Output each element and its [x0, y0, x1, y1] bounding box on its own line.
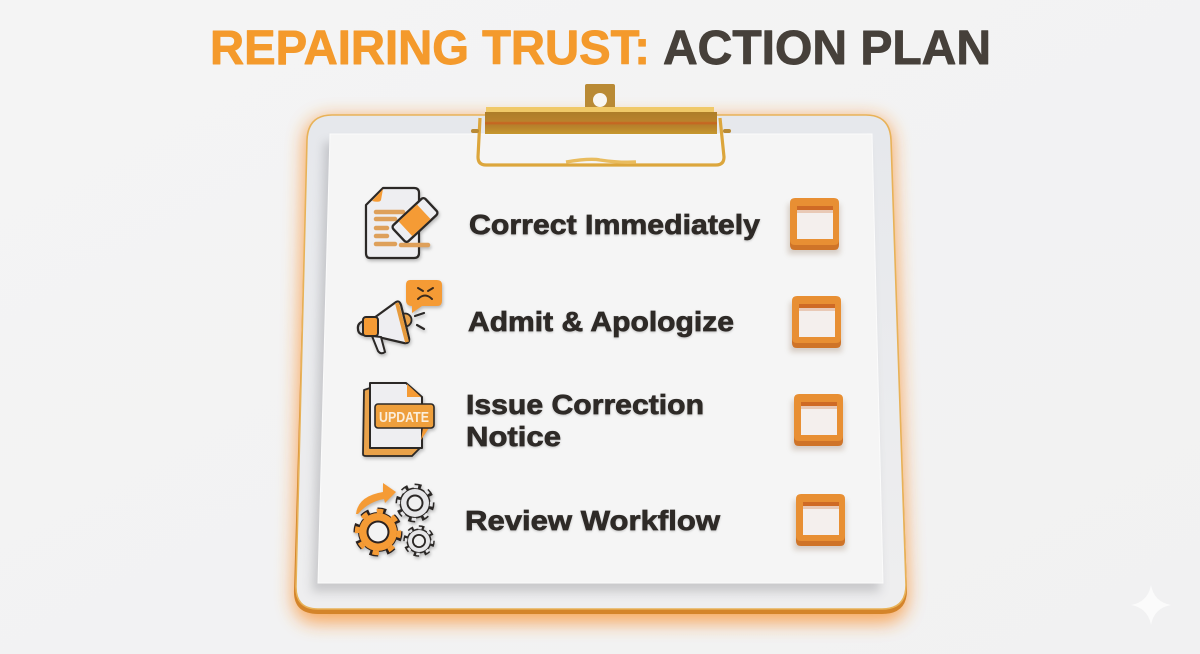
- icon: gears and arrow: [356, 483, 432, 554]
- paper sheet: [312, 134, 883, 592]
- label: issue correction notice: Issue Correction: [466, 389, 704, 420]
- icon: megaphone and speech bubble: [358, 280, 442, 353]
- icon: update document: UPDATE: [379, 409, 429, 426]
- icon: document and eraser: [366, 188, 439, 258]
- label: issue correction notice: [466, 389, 704, 452]
- checkbox 3: [792, 394, 844, 450]
- label: issue correction notice: Notice: [466, 421, 561, 452]
- icon: update document: [363, 383, 434, 456]
- title: ACTION PLAN: [663, 22, 991, 75]
- label: admit and apologize: Admit & Apologize: [468, 306, 734, 337]
- row 4: review workflow: [356, 483, 846, 554]
- clipboard board: [293, 115, 908, 623]
- label: review workflow: Review Workflow: [465, 505, 720, 536]
- title: [210, 22, 991, 75]
- row 2: admit and apologize: [358, 280, 842, 353]
- sparkle watermark: [1131, 585, 1171, 625]
- row 3: issue correction notice: [363, 383, 844, 456]
- checkbox 2: [790, 296, 842, 352]
- label: correct immediately: Correct Immediately: [469, 209, 760, 240]
- clip: [471, 84, 731, 168]
- checkbox 4: [794, 494, 846, 550]
- checkbox 1: [788, 198, 840, 254]
- row 1: correct immediately: [366, 188, 840, 258]
- title: REPAIRING TRUST:: [210, 22, 650, 75]
